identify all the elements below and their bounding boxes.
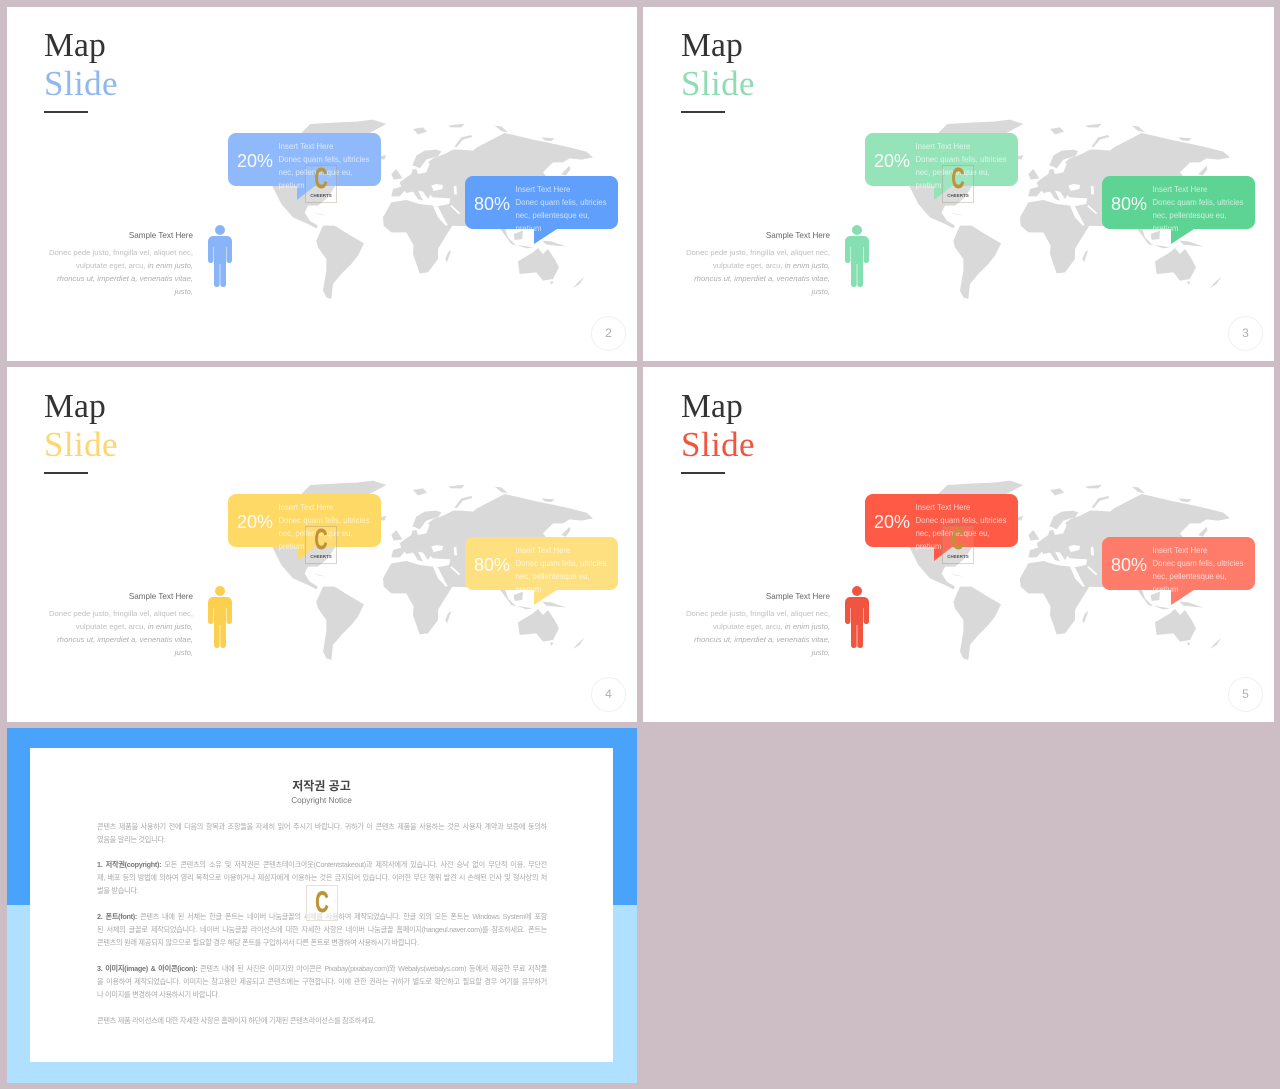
world map	[910, 480, 1230, 660]
callout: 80%: pretium	[516, 224, 542, 232]
callout: 20%	[228, 494, 381, 561]
watermark logo	[305, 526, 337, 564]
heading: Map Slide: Slide	[681, 64, 755, 103]
page number: 2	[605, 326, 612, 340]
callout: 20%: 20%	[874, 151, 910, 171]
sample text block: justo,	[812, 287, 830, 296]
callout: 20%: Insert Text Here	[916, 502, 970, 512]
callout: 80%: 80%	[1111, 555, 1147, 575]
callout: 80%	[1102, 537, 1255, 605]
callout: 80%: pretium	[1152, 584, 1178, 594]
callout: 80%	[1102, 176, 1255, 244]
sample text block: vulputate eget, arcu, in enim justo,	[76, 622, 193, 631]
sample text block	[686, 592, 830, 657]
heading: Map Slide	[44, 388, 118, 464]
notice body text: 나 이미지를 변경하여 사용하시기 바랍니다.	[97, 990, 220, 999]
panel: green map slide	[644, 7, 1274, 361]
callout: 20%	[228, 133, 381, 200]
sample text block: justo,	[175, 648, 193, 657]
sample text block: Sample Text Here	[766, 592, 830, 601]
sample text block: vulputate eget, arcu, in enim justo,	[76, 261, 193, 270]
heading: Map Slide: Slide	[44, 425, 118, 464]
page number	[591, 677, 626, 712]
callout: 80%: Donec quam felis, ultricies	[516, 558, 607, 568]
notice body text: 1. 저작권(copyright): 모든 콘텐츠의 소유 및 저작권은 콘텐츠테이크아웃(Contentstakeout)과 제작사에게 있습니다. 사전 승낙 없이 무단적 이용, 무단전	[97, 860, 547, 869]
sample text block: Donec pede justo, fringilla vel, aliquet nec,	[686, 609, 830, 618]
white notice sheet	[30, 748, 613, 1062]
callout: 20%: nec, pellentesque eu,	[916, 528, 990, 538]
panel: red map slide	[644, 368, 1274, 722]
notice body text: 였음을 알리는 것입니다.	[97, 835, 165, 844]
callout: 80%: Insert Text Here	[1152, 184, 1207, 194]
heading: Map Slide: Slide	[44, 64, 118, 103]
notice body text: 된 서체의 글꼴로 제작되었습니다. 네이버 나눔글꼴 라이선스에 대한 자세한 사항은 네이버 나눔글꼴 홈페이지(hangeul.naver.com)를 참조하세요. 폰트는	[97, 925, 547, 934]
callout: 80%: pretium	[516, 584, 542, 594]
callout: 20%: Donec quam felis, ultricies	[278, 154, 370, 164]
notice body text: 2. 폰트(font): 콘텐츠 내에 된 서체는 한글 폰트는 네이버 나눔글꼴의 서체를 사용하여 제작되었습니다. 한글 외의 모든 폰트는 Windows System에 포함	[97, 912, 547, 921]
sample text block: justo,	[175, 287, 193, 296]
callout: 20%: Donec quam felis, ultricies	[916, 516, 1007, 524]
callout: 20%: Insert Text Here	[916, 142, 970, 150]
watermark logo: CHEERTS	[947, 554, 969, 559]
page number	[1228, 677, 1263, 712]
sample text block: Donec pede justo, fringilla vel, aliquet nec,	[49, 609, 193, 618]
page number	[1228, 316, 1263, 351]
heading: Map Slide	[681, 388, 755, 464]
icon: person	[845, 586, 869, 648]
notice body text: 콘텐츠 제품 라이선스에 대한 자세한 사항은 홈페이지 하단에 기재된 콘텐츠라이선스를 참조하세요.	[97, 1016, 376, 1025]
sample text block	[49, 231, 193, 296]
icon: person	[208, 225, 232, 287]
sample text block	[49, 592, 193, 657]
callout: 20%: 20%	[237, 151, 273, 171]
callout: 80%: Insert Text Here	[516, 546, 570, 554]
callout: 20%: Insert Text Here	[278, 142, 333, 150]
callout: 80%: pretium	[1152, 224, 1178, 232]
callout: 80%: nec, pellentesque eu,	[1152, 572, 1227, 580]
callout: 80%: nec, pellentesque eu,	[516, 572, 590, 580]
notice body text	[97, 822, 548, 1025]
notice body text: 콘텐츠의 원래 제공되지 않으므로 필요할 경우 해당 폰트를 구입하셔서 다른 폰트로 변경하여 사용하시기 바랍니다.	[97, 938, 419, 947]
callout: 20%: Insert Text Here	[278, 502, 333, 512]
notice body text: 을 이용하여 제작되었습니다. 이미지는 참고용만 제공되고 콘텐츠에는 구현합니다. 이에 관한 권리는 귀하가 별도로 확인하고 필요할 경우 여기를 유무하거	[97, 977, 547, 986]
sample text block: Sample Text Here	[129, 231, 193, 240]
world map	[272, 120, 593, 299]
callout: 80%: Insert Text Here	[516, 184, 570, 194]
callout: 80%: Donec quam felis, ultricies	[1152, 198, 1244, 206]
panel: copyright notice	[7, 728, 637, 1083]
callout: 80%: 80%	[474, 194, 510, 214]
sample text block: Sample Text Here	[129, 592, 193, 601]
sample text block: rhoncus ut, imperdiet a, venenatis vitae,	[57, 274, 193, 283]
callout: 20%: 20%	[874, 512, 910, 532]
callout: 20%	[865, 133, 1018, 200]
callout: 20%: 20%	[237, 512, 273, 532]
sample text block: rhoncus ut, imperdiet a, venenatis vitae,	[694, 274, 830, 283]
title: 저작권 공고: 저작권 공고	[292, 779, 351, 793]
callout: 20%: Donec quam felis, ultricies	[278, 516, 370, 524]
heading: Map Slide: Map	[681, 27, 743, 64]
callout: 20%: nec, pellentesque eu,	[278, 168, 353, 176]
world map	[272, 480, 593, 660]
heading underline	[44, 111, 88, 113]
sample text block: rhoncus ut, imperdiet a, venenatis vitae,	[57, 635, 193, 644]
sample text block: Sample Text Here	[766, 231, 830, 240]
heading: Map Slide: Map	[44, 388, 106, 425]
callout: 20%: Donec quam felis, ultricies	[916, 154, 1007, 164]
page number	[591, 316, 626, 351]
panel: blue map slide	[7, 7, 637, 361]
callout: 80%: 80%	[1111, 194, 1147, 214]
sample text block	[686, 231, 830, 296]
callout: 80%	[465, 176, 618, 244]
heading underline	[681, 472, 725, 474]
page number: 4	[605, 687, 612, 701]
sample text block: Donec pede justo, fringilla vel, aliquet nec,	[686, 248, 830, 257]
watermark logo	[305, 165, 337, 203]
sample text block: justo,	[812, 648, 830, 657]
heading underline	[681, 111, 725, 113]
notice body text: 3. 이미지(image) & 아이콘(icon): 콘텐츠 내에 된 사진은 이미지와 아이콘은 Pixabay(pixabay.com)와 Webalys(webalys.com) 등에서 제공한 무료 저작물	[97, 964, 547, 973]
notice body text: 재, 배포 등의 방법에 의하여 영리 목적으로 이용하거나 제삼자에게 이용하는 것은 금지되어 있습니다. 이러한 무단 행위 발견 시 손해된 민사 및 형사상의 처	[97, 873, 547, 882]
icon: person	[845, 225, 869, 287]
watermark logo: C	[315, 886, 329, 919]
panel: yellow map slide	[7, 368, 637, 722]
icon: person	[208, 586, 232, 648]
callout: 20%	[865, 494, 1018, 561]
callout: 80%: Insert Text Here	[1152, 546, 1207, 554]
callout: 20%: nec, pellentesque eu,	[278, 528, 353, 538]
watermark logo	[942, 526, 974, 564]
callout: 80%: nec, pellentesque eu,	[516, 210, 590, 220]
callout: 20%: pretium	[278, 542, 304, 550]
sample text block: rhoncus ut, imperdiet a, venenatis vitae,	[694, 635, 830, 644]
watermark logo	[306, 885, 338, 921]
lower light blue band	[7, 905, 637, 1083]
callout: 20%: pretium	[916, 542, 942, 550]
watermark logo: CHEERTS	[310, 193, 332, 198]
callout: 80%: 80%	[474, 555, 510, 575]
notice body text: 벌을 받습니다.	[97, 886, 138, 895]
heading: Map Slide: Slide	[681, 425, 755, 464]
world map	[910, 120, 1230, 299]
callout: 20%: nec, pellentesque eu,	[916, 168, 990, 176]
notice body text: 콘텐츠 제품을 사용하기 전에 다음의 항목과 조항들을 자세히 읽어 주시기 바랍니다. 귀하가 이 콘텐츠 제품을 사용하는 것은 사용자 계약과 보증에 동의하	[97, 822, 547, 831]
heading: Map Slide	[681, 27, 755, 103]
watermark logo: CHEERTS	[947, 193, 969, 198]
sample text block: vulputate eget, arcu, in enim justo,	[713, 261, 830, 270]
callout: 80%: Donec quam felis, ultricies	[1152, 558, 1244, 568]
callout: 80%: nec, pellentesque eu,	[1152, 210, 1227, 220]
callout: 20%: pretium	[278, 180, 304, 190]
heading: Map Slide: Map	[681, 388, 743, 425]
callout: 20%: pretium	[916, 180, 942, 190]
page number: 5	[1242, 687, 1249, 701]
callout: 80%: Donec quam felis, ultricies	[516, 198, 607, 206]
subtitle: Copyright Notice	[291, 796, 352, 805]
watermark logo	[942, 165, 974, 203]
heading underline	[44, 472, 88, 474]
heading: Map Slide	[44, 27, 118, 103]
page number: 3	[1242, 326, 1249, 340]
sample text block: vulputate eget, arcu, in enim justo,	[713, 622, 830, 631]
heading: Map Slide: Map	[44, 27, 106, 64]
callout: 80%	[465, 537, 618, 605]
watermark logo: CHEERTS	[310, 554, 332, 559]
sample text block: Donec pede justo, fringilla vel, aliquet nec,	[49, 248, 193, 257]
